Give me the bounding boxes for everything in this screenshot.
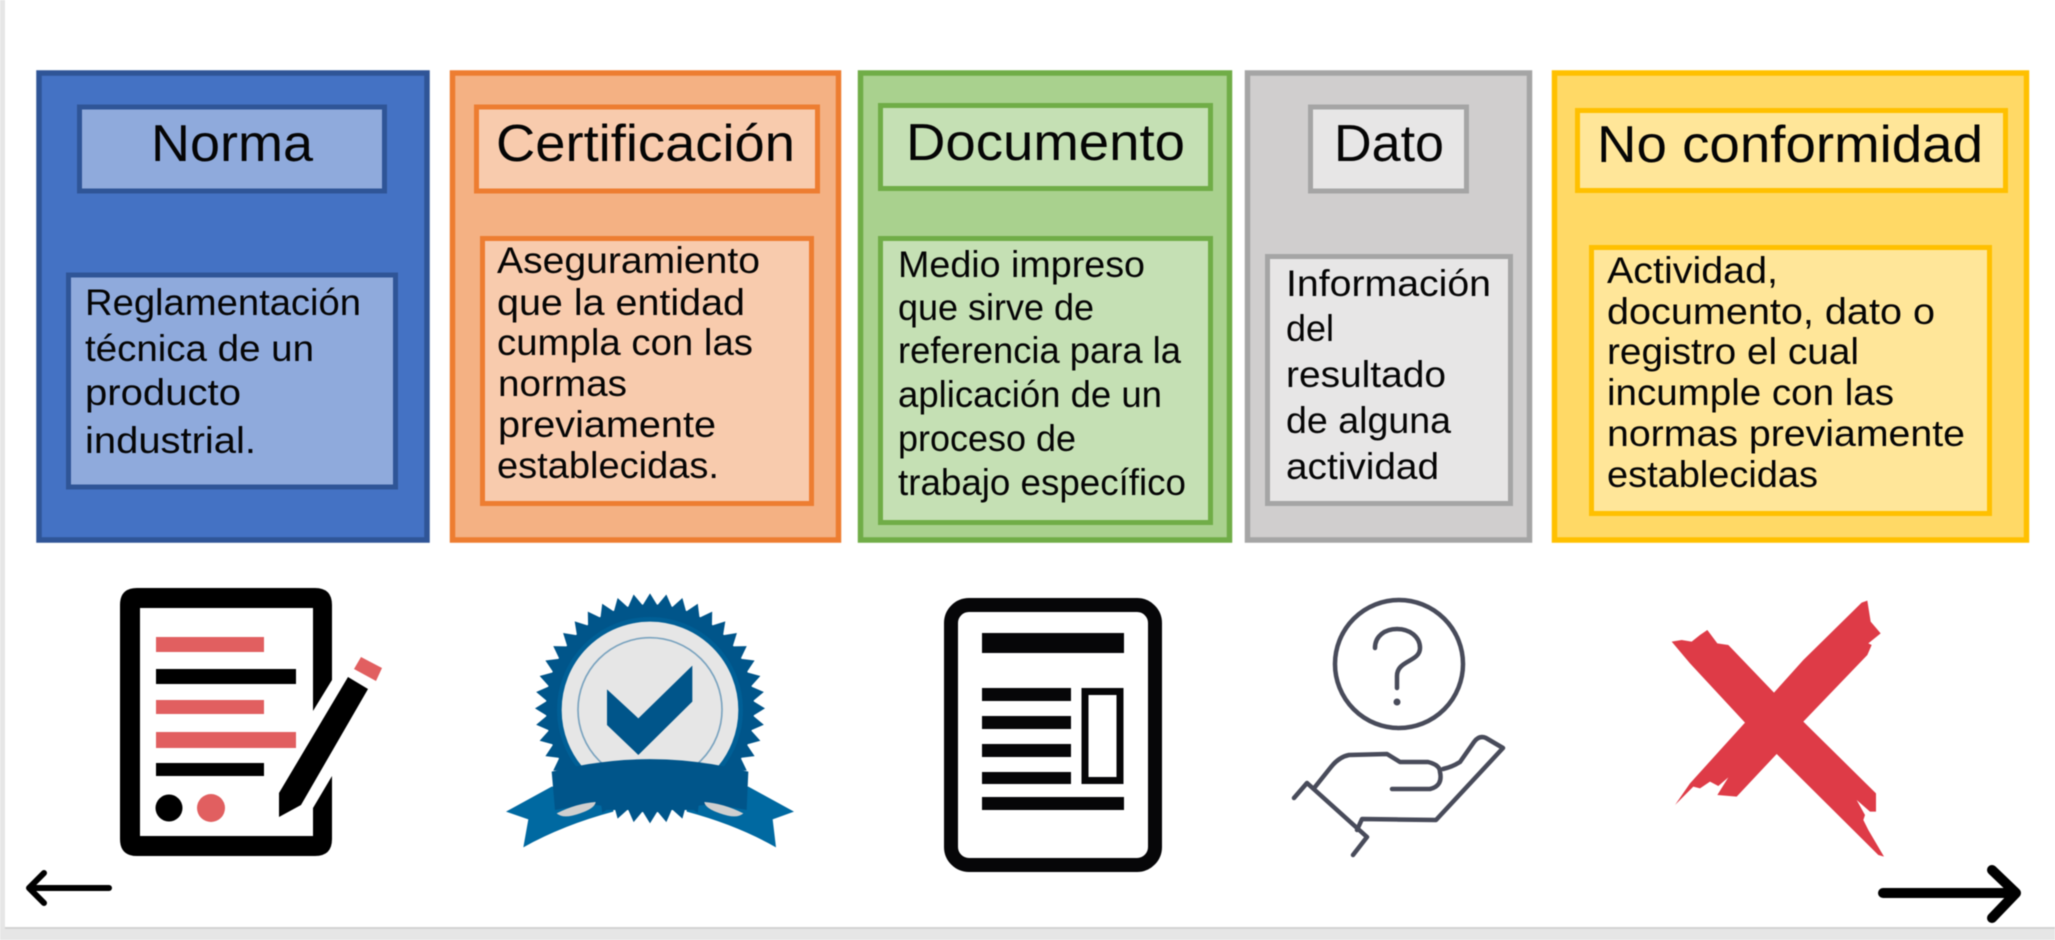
- text block: Documento definition: trabajo específico: [898, 462, 1186, 503]
- text block: Dato definition: [1268, 256, 1510, 504]
- arrow: previous: [29, 873, 109, 903]
- text block: No conformidad definition: incumple con las: [1607, 372, 1894, 413]
- text block: Dato definition: resultado: [1286, 354, 1446, 395]
- heading: Norma: [80, 107, 384, 191]
- heading: Certificación: [476, 107, 818, 191]
- text block: Documento definition: que sirve de: [898, 287, 1094, 328]
- text block: No conformidad definition: [1592, 248, 1990, 514]
- text block: Norma definition: técnica de un: [85, 328, 314, 369]
- heading: Documento: [880, 106, 1210, 188]
- text block: Documento definition: referencia para la: [898, 330, 1181, 371]
- text block: No conformidad definition: registro el cual: [1607, 331, 1859, 372]
- text block: Certificación definition: cumpla con las: [497, 322, 753, 363]
- heading: Norma: Norma: [151, 115, 313, 173]
- heading: Documento: Documento: [906, 114, 1185, 172]
- text block: Certificación definition: Aseguramiento: [497, 240, 760, 281]
- text block: Certificación definition: [482, 238, 812, 504]
- text block: Documento definition: aplicación de un: [898, 374, 1162, 415]
- text block: Documento definition: [880, 238, 1210, 522]
- heading: Certificación: Certificación: [496, 115, 795, 173]
- text block: Certificación definition: normas: [498, 363, 627, 404]
- text block: No conformidad definition: documento, dato o: [1607, 291, 1935, 332]
- panel: Dato: [1248, 73, 1530, 540]
- icon: document with pen: [120, 588, 382, 856]
- heading: Dato: Dato: [1334, 115, 1444, 173]
- text block: Documento definition: Medio impreso: [898, 244, 1145, 285]
- text block: No conformidad definition: Actividad,: [1607, 250, 1778, 291]
- icon: certification seal: [506, 573, 794, 847]
- panel: Norma: [39, 73, 427, 540]
- icon: red cross: [1672, 601, 1884, 857]
- icon: printed document: [951, 605, 1155, 865]
- text block: Norma definition: producto: [85, 372, 241, 413]
- text block: Documento definition: proceso de: [898, 418, 1076, 459]
- text block: Dato definition: actividad: [1286, 446, 1439, 487]
- panel: No conformidad: [1554, 73, 2026, 540]
- panel: Documento: [860, 73, 1230, 540]
- text block: Dato definition: de alguna: [1286, 400, 1451, 441]
- heading: Dato: [1310, 107, 1466, 191]
- heading: No conformidad: No conformidad: [1597, 116, 1983, 174]
- text block: No conformidad definition: establecidas: [1607, 454, 1818, 495]
- text block: Norma definition: industrial.: [85, 420, 256, 461]
- text block: Dato definition: Información: [1286, 263, 1491, 304]
- text block: Dato definition: del: [1286, 308, 1334, 349]
- text block: Certificación definition: que la entidad: [497, 282, 745, 323]
- icon: hand holding question mark: [1294, 600, 1503, 855]
- text block: No conformidad definition: normas previamente: [1607, 413, 1965, 454]
- arrow: next: [1883, 870, 2016, 918]
- heading: No conformidad: [1578, 110, 2006, 190]
- text block: Norma definition: Reglamentación: [85, 282, 361, 323]
- text block: Norma definition: [68, 275, 396, 487]
- text block: Certificación definition: previamente: [498, 404, 716, 445]
- text block: Certificación definition: establecidas.: [497, 445, 719, 486]
- panel: Certificación: [452, 73, 838, 540]
